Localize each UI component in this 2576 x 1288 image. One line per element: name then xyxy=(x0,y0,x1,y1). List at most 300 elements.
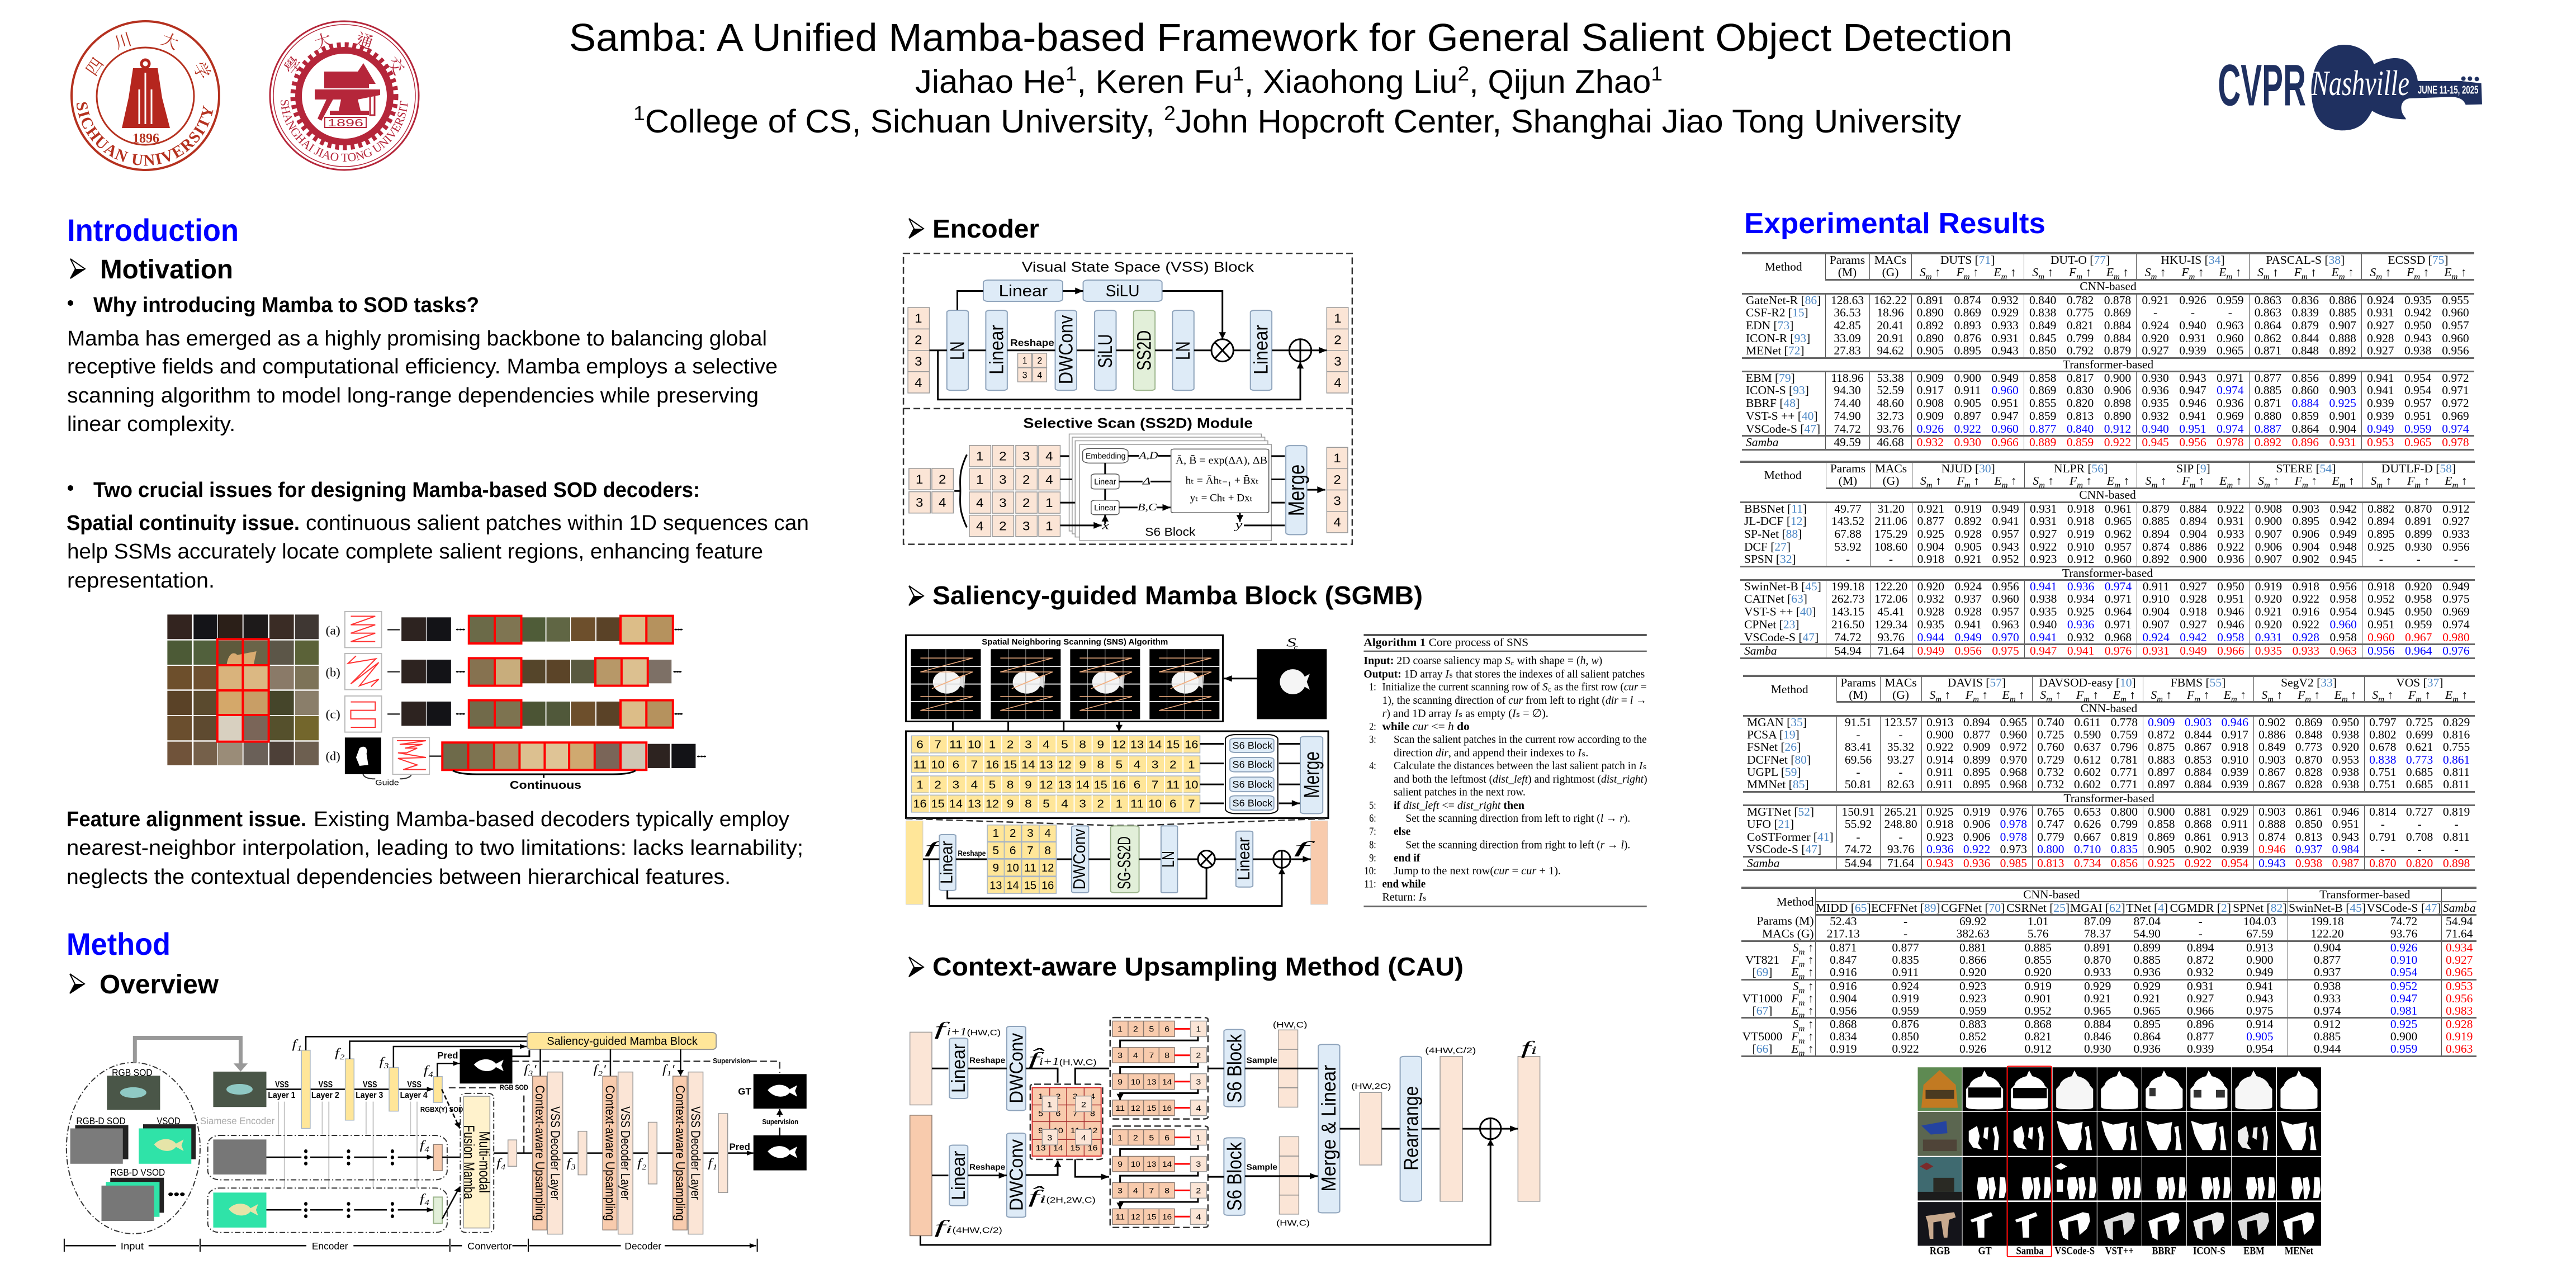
column labels: ICON-S xyxy=(2193,1245,2225,1257)
table 4: RGB-T SOD results: 199.18 xyxy=(2311,915,2344,928)
authors: 1 xyxy=(1233,62,1244,85)
table 4: RGB-T SOD results: 0.894 xyxy=(2187,941,2214,954)
table 1: RGB SOD results: 0.887 xyxy=(2255,422,2281,435)
table 1: RGB SOD results: HKU-IS [34] xyxy=(2161,253,2224,267)
table 3: VSOD results: Sm ↑ xyxy=(2040,688,2061,704)
table 4: RGB-T SOD results: 87.09 xyxy=(2084,915,2111,928)
table 3: VSOD results: Transformer-based xyxy=(2063,792,2154,805)
table 2: RGB-D SOD results: 0.932 xyxy=(1917,592,1944,605)
table 3: VSOD results: 0.905 xyxy=(2148,842,2175,856)
table 2: RGB-D SOD results: Sm ↑ xyxy=(2258,474,2279,490)
algorithm 1: end if xyxy=(1394,851,1420,864)
table 4: RGB-T SOD results: 0.919 xyxy=(2446,1030,2473,1043)
sequences box: 9 xyxy=(1097,738,1104,751)
table 1: RGB SOD results: 0.960 xyxy=(1991,422,2019,435)
table 3: VSOD results: Fm ↑ xyxy=(2298,688,2320,704)
table 2: RGB-D SOD results: NLPR [56] xyxy=(2054,462,2108,475)
module: SS2D: 3 xyxy=(1333,494,1341,508)
table 1: RGB SOD results: 0.885 xyxy=(2329,306,2356,319)
table 4: RGB-T SOD results: 0.924 xyxy=(1892,979,1919,993)
table 2: RGB-D SOD results: 0.931 xyxy=(2255,631,2282,644)
table 3: VSOD results: DCFNet [80] xyxy=(1747,753,1811,766)
table 2: RGB-D SOD results: 0.920 xyxy=(2255,592,2282,605)
lower token sequence: 15 xyxy=(1147,1213,1156,1221)
table 3: VSOD results: 0.678 xyxy=(2369,740,2396,754)
patch grid: 10 xyxy=(1053,1126,1063,1135)
table 1: RGB SOD results: 0.969 xyxy=(2217,409,2244,423)
table 1: RGB SOD results: 0.813 xyxy=(2067,409,2094,423)
table 1: RGB SOD results: 0.907 xyxy=(2329,319,2356,332)
table 2: RGB-D SOD results: - xyxy=(2454,552,2458,566)
VSS-like path with SG-SS2D: 4 xyxy=(1044,827,1051,840)
table 4: RGB-T SOD results: 93.76 xyxy=(2390,927,2417,940)
module: SS2D: Linear xyxy=(1094,477,1116,486)
table 3: VSOD results: 0.778 xyxy=(2111,716,2138,729)
table 3: VSOD results: 0.861 xyxy=(2185,830,2212,844)
sequences box: 9 xyxy=(1025,779,1032,791)
module: SS2D: 3 xyxy=(916,495,923,509)
algorithm 1: Initialize the current scanning row of S꜀ as the first row (cur = xyxy=(1382,680,1647,693)
decoder: Context-aware Upsampling xyxy=(603,1085,617,1221)
table 4: RGB-T SOD results: - xyxy=(2199,915,2203,928)
table 1: RGB SOD results: 0.859 xyxy=(2029,409,2056,423)
VSS-like path with SG-SS2D: 1 xyxy=(992,827,999,840)
table 4: RGB-T SOD results: Em ↑ xyxy=(1791,965,1814,981)
stage axis: Input xyxy=(121,1241,144,1252)
module: SS2D: 3 xyxy=(1022,519,1030,533)
table 1: RGB SOD results: - xyxy=(2228,306,2232,319)
table 4: RGB-T SOD results: 0.930 xyxy=(2084,1042,2111,1055)
table 2: RGB-D SOD results: 0.933 xyxy=(2442,527,2470,541)
table 1: RGB SOD results: Em ↑ xyxy=(2219,266,2241,281)
table 2: RGB-D SOD results: Fm ↑ xyxy=(2407,474,2430,490)
VSS-like path with SG-SS2D: 14 xyxy=(1006,879,1019,892)
table 4: RGB-T SOD results: 0.900 xyxy=(2246,953,2273,967)
encoder stream: RGB: Layer 3 xyxy=(356,1090,383,1100)
heading: Experimental Results: Experimental Results xyxy=(1744,207,2045,240)
table 3: VSOD results: 0.637 xyxy=(2074,740,2101,754)
table 4: RGB-T SOD results: 0.850 xyxy=(1892,1030,1919,1043)
table 2: RGB-D SOD results: 93.76 xyxy=(1877,631,1905,644)
table 4: RGB-T SOD results: Method xyxy=(1777,894,1814,908)
upper token sequence: 6 xyxy=(1164,1025,1169,1034)
table 3: VSOD results: 91.51 xyxy=(1845,716,1872,729)
table 1: RGB SOD results: Sm ↑ xyxy=(2032,266,2053,281)
table 4: RGB-T SOD results: Sm ↑ xyxy=(1793,941,1814,956)
table 4: RGB-T SOD results: 0.956 xyxy=(2446,992,2473,1005)
table 2: RGB-D SOD results: 0.936 xyxy=(2067,580,2094,593)
module: multi-modal fusion Mamba xyxy=(442,1093,494,1233)
authors: Jiahao He xyxy=(915,64,1061,100)
module: SS2D: 1 xyxy=(1045,519,1053,533)
table 4: RGB-T SOD results: [66] xyxy=(1753,1042,1772,1055)
text block: spatial continuity issue: help SSMs accurately locate complete salient regions, enhancing feature xyxy=(67,540,763,564)
VSS-like path with SG-SS2D: Linear xyxy=(938,841,956,884)
text block: Mamba description xyxy=(67,327,778,436)
table 1: RGB SOD results: 0.896 xyxy=(2292,435,2319,449)
input feature paths: i xyxy=(945,1223,953,1235)
sequences box: 16 xyxy=(1112,779,1126,791)
table 1: RGB SOD results: 0.931 xyxy=(2329,435,2356,449)
table 2: RGB-D SOD results: 0.948 xyxy=(2330,540,2357,553)
table 1: RGB SOD results: 0.839 xyxy=(2292,306,2319,319)
table 4: RGB-T SOD results: 0.910 xyxy=(2390,953,2417,967)
table 2: RGB-D SOD results: 0.958 xyxy=(2405,592,2432,605)
table 2: RGB-D SOD results: 0.919 xyxy=(2255,580,2282,593)
logo: CVPR Nashville: JUNE 11-15, 2025 xyxy=(2418,84,2478,97)
block: VSS: 2 xyxy=(1037,356,1042,366)
table 4: RGB-T SOD results: 0.959 xyxy=(1959,1004,1986,1017)
table 2: RGB-D SOD results: (M) xyxy=(1839,474,1857,487)
table 1: RGB SOD results: 0.792 xyxy=(2067,344,2094,357)
sequences box: 16 xyxy=(986,759,999,771)
table 2: RGB-D SOD results: BBSNet [11] xyxy=(1744,502,1807,515)
table 4: RGB-T SOD results: 0.965 xyxy=(2084,1004,2111,1017)
table 2: RGB-D SOD results: 0.959 xyxy=(2405,618,2432,631)
label: guide xyxy=(363,774,411,787)
table 2: RGB-D SOD results: 0.918 xyxy=(1917,552,1944,566)
table 3: VSOD results: 0.946 xyxy=(2332,805,2359,818)
patch grid: 9 xyxy=(1038,1126,1043,1135)
arrows xyxy=(387,629,442,756)
table 3: VSOD results: 0.828 xyxy=(2295,778,2322,791)
sequences box: 11 xyxy=(949,738,963,751)
subheading: Encoder: Encoder xyxy=(932,214,1039,243)
supervision dashed path: RGB SOD xyxy=(500,1084,528,1092)
sequences box: 4 xyxy=(1061,798,1068,810)
table 3: VSOD results: 0.922 xyxy=(1963,842,1990,856)
table 4: RGB-T SOD results: 0.877 xyxy=(2187,1030,2214,1043)
upper token sequence: 3 xyxy=(1117,1051,1123,1060)
table 3: VSOD results: - xyxy=(1856,765,1860,779)
table 2: RGB-D SOD results: 0.918 xyxy=(2180,605,2207,618)
logo: Sichuan University: 川 xyxy=(111,26,134,54)
table 4: RGB-T SOD results: 217.13 xyxy=(1827,927,1860,940)
table 2: RGB-D SOD results: 0.960 xyxy=(2105,552,2132,566)
table 3: VSOD results: 0.985 xyxy=(2000,856,2027,870)
table 2: RGB-D SOD results: 0.968 xyxy=(2105,631,2132,644)
input feature paths: (H,W,C) xyxy=(1059,1057,1097,1067)
table 2: RGB-D SOD results: 0.911 xyxy=(2143,580,2169,593)
table 1: RGB SOD results: 0.940 xyxy=(2179,319,2206,332)
table 2: RGB-D SOD results: (G) xyxy=(1883,474,1899,487)
table 4: RGB-T SOD results: 0.821 xyxy=(2024,1030,2052,1043)
table 4: RGB-T SOD results: 0.981 xyxy=(2390,1004,2417,1017)
table 4: RGB-T SOD results: 0.868 xyxy=(1830,1017,1857,1031)
table 4: RGB-T SOD results: 0.959 xyxy=(2390,1042,2417,1055)
encoder stream: RGB: f₁ xyxy=(292,1037,302,1051)
table 1: RGB SOD results: 0.849 xyxy=(2029,319,2056,332)
table 2: RGB-D SOD results: 0.949 xyxy=(1992,502,2019,515)
table 4: RGB-T SOD results: 0.920 xyxy=(1959,965,1986,979)
subheading: CAU: Context-aware Upsampling Method (CAU) xyxy=(932,952,1464,981)
lower token sequence: 6 xyxy=(1164,1134,1169,1142)
table 3: VSOD results: 0.954 xyxy=(2222,856,2248,870)
text block: feature alignment issue: neglects the contextual dependencies between hierarchical features. xyxy=(67,865,731,889)
row 4: table xyxy=(1918,1202,2321,1246)
table 2: RGB-D SOD results: 0.961 xyxy=(2105,502,2132,515)
sequences box: 1 xyxy=(1116,798,1123,810)
table 1: RGB SOD results: 0.863 xyxy=(2255,293,2281,306)
table 4: RGB-T SOD results: 0.926 xyxy=(1959,1042,1986,1055)
sequences box: 15 xyxy=(1003,759,1017,771)
table 3: VSOD results: 93.76 xyxy=(1887,842,1914,856)
table 2: RGB-D SOD results: 129.34 xyxy=(1874,618,1907,631)
table 1: RGB SOD results: 0.947 xyxy=(1991,409,2019,423)
table 1: RGB SOD results: 0.893 xyxy=(1954,319,1981,332)
table 1: RGB SOD results: DUT-O [77] xyxy=(2051,253,2110,267)
table 3: VSOD results: 0.946 xyxy=(2222,716,2248,729)
table 3: VSOD results: 0.870 xyxy=(2369,856,2396,870)
module: saliency-guided Mamba block: Saliency-guided Mamba Block xyxy=(547,1035,698,1047)
block: VSS: Linear xyxy=(985,325,1007,375)
table 2: RGB-D SOD results: 0.980 xyxy=(2442,631,2470,644)
encoder stream: flow: f₄ xyxy=(420,1191,430,1205)
block: VSS: 1 xyxy=(1334,311,1342,325)
table 3: VSOD results: DAVIS [57] xyxy=(1948,676,2006,689)
sequences box: 15 xyxy=(931,798,945,810)
table 4: RGB-T SOD results: 0.933 xyxy=(2084,965,2111,979)
table 1: RGB SOD results: 0.859 xyxy=(2292,409,2319,423)
sequences box: 8 xyxy=(1079,738,1086,751)
table 1: RGB SOD results: 0.885 xyxy=(2255,383,2281,397)
panel: encoder xyxy=(903,214,1352,544)
block: VSS: 1 xyxy=(1022,356,1027,366)
figure: overall architecture xyxy=(64,1033,807,1252)
table 3: VSOD results: 0.909 xyxy=(1963,740,1990,754)
table 3: VSOD results: 0.929 xyxy=(2222,805,2248,818)
table 3: VSOD results: 0.909 xyxy=(2148,716,2175,729)
table 4: RGB-T SOD results: 0.926 xyxy=(2390,941,2417,954)
module: SS2D: Linear xyxy=(1094,503,1116,513)
table 3: VSOD results: 0.819 xyxy=(2111,830,2138,844)
table 2: RGB-D SOD results: 0.905 xyxy=(1954,540,1982,553)
table 4: RGB-T SOD results: Fm ↑ xyxy=(1791,953,1814,969)
table 2: RGB-D SOD results: 0.934 xyxy=(2067,592,2094,605)
table 4: RGB-T SOD results: [67] xyxy=(1753,1004,1772,1017)
table 3: VSOD results: 0.976 xyxy=(2000,805,2027,818)
table 3: VSOD results: FBMS [55] xyxy=(2171,676,2225,689)
table 2: RGB-D SOD results: 31.20 xyxy=(1877,502,1905,515)
table 2: RGB-D SOD results: Em ↑ xyxy=(2107,474,2129,490)
table 2: RGB-D SOD results: 0.884 xyxy=(2180,502,2207,515)
table 4: RGB-T SOD results: 0.852 xyxy=(1959,1030,1986,1043)
text: Siamese encoder: Siamese Encoder xyxy=(200,1116,274,1126)
sequences box: 9 xyxy=(1079,759,1086,771)
table 1: RGB SOD results: 0.869 xyxy=(2029,383,2056,397)
table 4: RGB-T SOD results: Params (M) xyxy=(1756,914,1814,927)
table 3: VSOD results: 0.919 xyxy=(1963,805,1990,818)
table 1: RGB SOD results: 0.960 xyxy=(2217,332,2244,345)
algorithm 1: Set the scanning direction from right to left (r → l). xyxy=(1405,838,1630,851)
upper token sequence: 1 xyxy=(1196,1025,1201,1034)
table 2: RGB-D SOD results: 0.958 xyxy=(2330,631,2357,644)
module: SS2D: 1 xyxy=(1045,496,1053,510)
table 1: RGB SOD results: Sm ↑ xyxy=(2370,266,2391,281)
lower token sequence: 14 xyxy=(1162,1160,1172,1169)
table 1: RGB SOD results: 162.22 xyxy=(1874,293,1907,306)
table 3: VSOD results: 0.883 xyxy=(2148,753,2175,766)
table 3: VSOD results: Sm ↑ xyxy=(1929,688,1950,704)
sequences box: 6 xyxy=(1169,798,1177,810)
sequences box: 6 xyxy=(953,759,959,771)
affiliations: 1 xyxy=(633,102,645,125)
SNS algorithm box xyxy=(906,635,1223,722)
table 1: RGB SOD results: 0.931 xyxy=(2179,332,2206,345)
table 4: RGB-T SOD results: 0.905 xyxy=(2246,1030,2273,1043)
table 3: VSOD results: 0.937 xyxy=(2295,842,2322,856)
figure: scanning strategies on cat image xyxy=(167,612,707,792)
input feature paths: (4HW,C/2) xyxy=(953,1225,1002,1235)
lower token sequence: 3 xyxy=(1117,1186,1123,1195)
text block: feature alignment issue: Existing Mamba-based decoders typically employ xyxy=(314,808,789,831)
table 1: RGB SOD results: 0.978 xyxy=(2217,435,2244,449)
table 3: VSOD results: 0.886 xyxy=(2258,728,2285,741)
table 4: RGB-T SOD results: 0.912 xyxy=(2314,1017,2341,1031)
table 3: VSOD results: 69.56 xyxy=(1845,753,1872,766)
table 4: RGB-T SOD results: 0.963 xyxy=(2446,1042,2473,1055)
input group: ••• xyxy=(168,1187,185,1201)
table 2: RGB-D SOD results: CATNet [63] xyxy=(1744,592,1807,605)
strip: scan c: ••• xyxy=(456,711,466,717)
lower token sequence: 16 xyxy=(1162,1213,1172,1221)
table 1: RGB SOD results: DUTS [71] xyxy=(1940,253,1995,267)
table 2: RGB-D SOD results: 0.928 xyxy=(1917,605,1944,618)
table 1: RGB SOD results: 0.941 xyxy=(2367,383,2394,397)
table 3: VSOD results: 0.797 xyxy=(2369,716,2396,729)
table 1: RGB SOD results: 0.957 xyxy=(2404,396,2431,410)
logo: Sichuan University: 1896 xyxy=(132,131,159,146)
sequences box: 11 xyxy=(1166,779,1180,791)
table 3: VSOD results: 0.902 xyxy=(2185,842,2212,856)
table 3: VSOD results: - xyxy=(1856,728,1860,741)
encoder stream: RGB: Layer 2 xyxy=(311,1090,339,1100)
table 3: VSOD results: 0.819 xyxy=(2443,805,2470,818)
algorithm 1: else xyxy=(1394,825,1410,837)
table 2: RGB-D SOD results: Transformer-based xyxy=(2062,566,2153,579)
table 1: RGB SOD results: 0.941 xyxy=(2367,371,2394,385)
table 3: VSOD results: 0.911 xyxy=(2222,817,2248,831)
figure: context-aware upsampling xyxy=(910,1017,1540,1245)
table 4: RGB-T SOD results: 0.901 xyxy=(2024,992,2052,1005)
table 2: RGB-D SOD results: 0.964 xyxy=(2405,644,2432,657)
table 1: RGB SOD results: EDN [73] xyxy=(1746,319,1793,332)
table 3: VSOD results: CNN-based xyxy=(2081,702,2137,715)
VSS-like path with SG-SS2D xyxy=(906,821,1328,906)
table 4: RGB-T SOD results: VT1000 xyxy=(1742,992,1782,1005)
table 1: RGB SOD results: 0.945 xyxy=(2142,435,2169,449)
table 4: RGB-T SOD results: 0.904 xyxy=(2314,941,2341,954)
table 1: RGB SOD results: Em ↑ xyxy=(1993,266,2016,281)
table 4: RGB-T SOD results: 0.916 xyxy=(1830,979,1857,993)
table 3: VSOD results: 0.897 xyxy=(2148,765,2175,779)
table 4: RGB-T SOD results: 0.923 xyxy=(1959,992,1986,1005)
affiliations: College of CS, Sichuan University, xyxy=(645,103,1164,140)
table 3: VSOD results: - xyxy=(1856,830,1860,844)
table 2: RGB-D SOD results: 0.895 xyxy=(2293,514,2319,528)
block: VSS: 1 xyxy=(915,311,922,325)
table 4: RGB-T SOD results: - xyxy=(2199,927,2203,940)
table 2: RGB-D SOD results: 0.928 xyxy=(1954,605,1982,618)
module: SS2D: 2 xyxy=(939,472,946,486)
table 3: VSOD results: FSNet [26] xyxy=(1747,740,1801,754)
sequences box: S6 Block xyxy=(1233,760,1272,770)
table 3: VSOD results: 0.844 xyxy=(2185,728,2212,741)
table 3: VSOD results: 0.914 xyxy=(1926,753,1953,766)
decoder: VSS Decoder Layer xyxy=(618,1106,632,1200)
table 1: RGB SOD results: 0.879 xyxy=(2292,319,2319,332)
module: SS2D: 3 xyxy=(1022,449,1030,463)
table 2: RGB-D SOD results: 0.956 xyxy=(2330,580,2357,593)
table 3: VSOD results: - xyxy=(2381,817,2385,831)
input feature paths: f̂ xyxy=(1028,1048,1045,1069)
table 2: RGB-D SOD results: 0.935 xyxy=(2030,605,2057,618)
table 3: VSOD results: Sm ↑ xyxy=(2372,688,2393,704)
coarse saliency map: S xyxy=(1286,636,1296,650)
sequences box xyxy=(906,731,1328,818)
table 2: RGB-D SOD results: 0.974 xyxy=(2442,618,2470,631)
module: multi-modal fusion Mamba: Multi-modal xyxy=(476,1131,493,1193)
patch grid: 12 xyxy=(1088,1126,1097,1135)
input feature paths: i+1 xyxy=(947,1026,967,1038)
encoder stream: RGB: VSS xyxy=(407,1079,422,1089)
decoder xyxy=(494,1049,754,1234)
table 3: VSOD results: 0.602 xyxy=(2074,765,2101,779)
table 1: RGB SOD results: 0.953 xyxy=(2367,435,2394,449)
table 2: RGB-D SOD results: 0.930 xyxy=(2405,540,2432,553)
table 3: VSOD results: 0.881 xyxy=(2185,805,2212,818)
logo: CVPR Nashville xyxy=(2218,45,2482,130)
module: SS2D: yₜ = Chₜ + Dxₜ xyxy=(1190,491,1253,504)
table 1: RGB SOD results: ICON-S [93] xyxy=(1746,383,1809,397)
table 1: RGB SOD results: 0.924 xyxy=(2367,293,2394,306)
table 2: RGB-D SOD results: 0.906 xyxy=(2293,527,2319,541)
table 1: RGB SOD results: 0.951 xyxy=(1991,396,2019,410)
table 1: RGB SOD results: 0.942 xyxy=(2404,306,2431,319)
table 1: RGB SOD results: - xyxy=(2191,306,2195,319)
lower token sequence: 10 xyxy=(1131,1160,1140,1169)
table 2: RGB-D SOD results: 0.949 xyxy=(1917,644,1944,657)
block: VSS: Linear xyxy=(999,282,1048,300)
table 2: RGB-D SOD results: 0.949 xyxy=(2180,644,2207,657)
table 2: RGB-D SOD results: 0.971 xyxy=(2105,592,2132,605)
sequences box: 5 xyxy=(1043,798,1050,810)
table 1: RGB SOD results: 0.974 xyxy=(2217,383,2244,397)
table 2: RGB-D SOD results: 0.945 xyxy=(2330,552,2357,566)
table 3: VSOD results: - xyxy=(2454,842,2459,856)
table 4: RGB-T SOD results: 0.834 xyxy=(1830,1030,1857,1043)
table 3: VSOD results: 0.938 xyxy=(2332,728,2359,741)
table 2: RGB-D SOD results: 0.907 xyxy=(2255,527,2282,541)
table 1: RGB SOD results: 0.884 xyxy=(2104,319,2131,332)
table 3: VSOD results: - xyxy=(1898,765,1903,779)
patch grid xyxy=(1030,1068,1109,1177)
table 1: RGB SOD results: 0.960 xyxy=(2442,306,2469,319)
table 2: RGB-D SOD results: 0.874 xyxy=(2142,540,2170,553)
column labels: GT xyxy=(1978,1245,1992,1257)
sequences box: 14 xyxy=(949,798,963,810)
coarse prediction: Pred xyxy=(437,1050,458,1061)
table 4: RGB-T SOD results: 0.885 xyxy=(2024,941,2052,954)
table 3: VSOD results: 0.829 xyxy=(2443,716,2470,729)
encoder stream: RGB: VSS xyxy=(319,1079,333,1089)
table 2: RGB-D SOD results: 0.975 xyxy=(1992,644,2019,657)
authors: , Xiaohong Liu xyxy=(1244,64,1458,100)
coarse prediction xyxy=(437,1049,529,1083)
table 4: RGB-T SOD results: 0.956 xyxy=(1830,1004,1857,1017)
sequences box: 6 xyxy=(916,738,924,751)
table 3: VSOD results: 0.867 xyxy=(2258,765,2285,779)
